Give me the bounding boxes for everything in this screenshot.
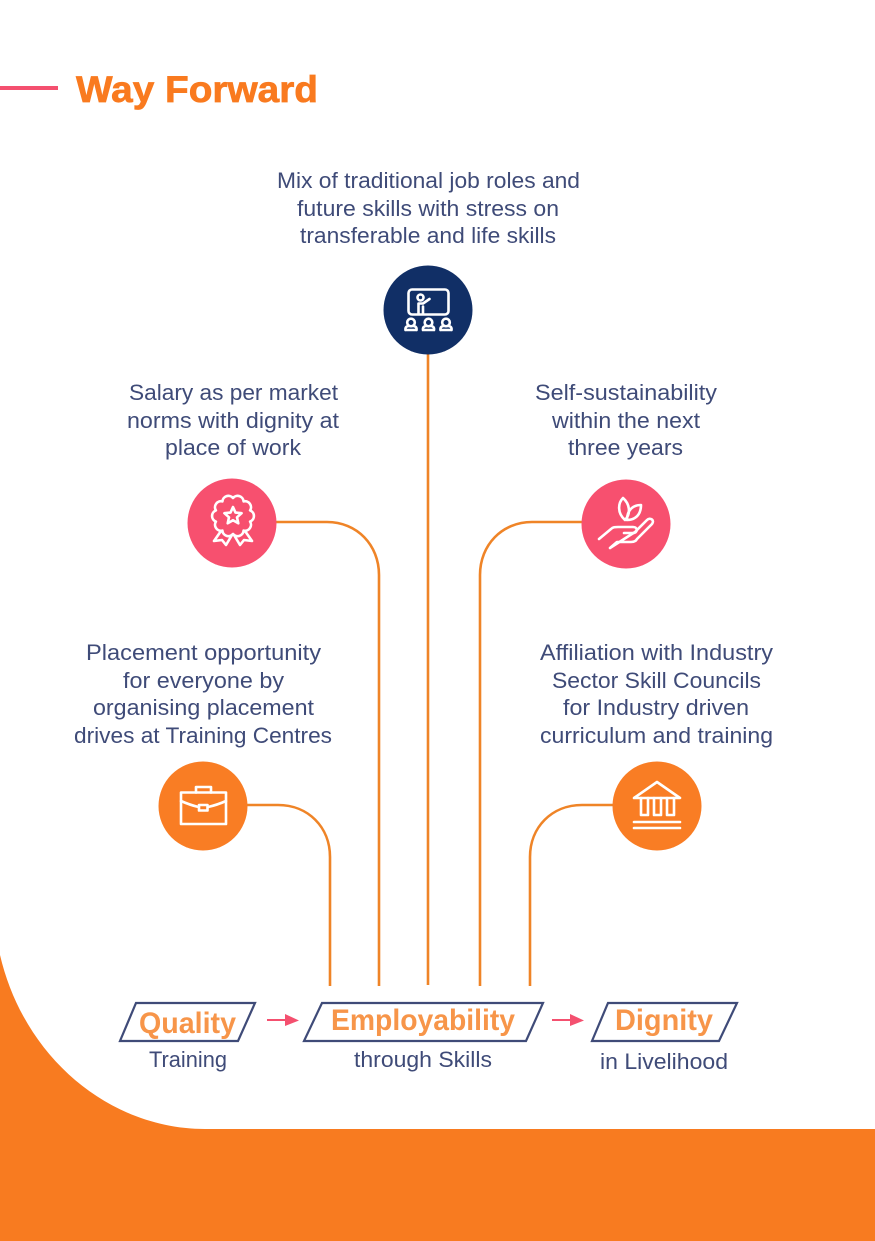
box: employability through skills: through Skills: [354, 1047, 492, 1072]
text: placement: Placement opportunity: [86, 640, 321, 665]
text: placement: [74, 640, 332, 748]
box: employability through skills: Employability: [331, 1004, 515, 1037]
icon: hand with plant: [582, 480, 670, 568]
text: self-sustainability: within the next: [551, 408, 700, 433]
arrow: [552, 1014, 584, 1026]
text: salary: norms with dignity at: [127, 408, 339, 433]
box: quality training: Training: [149, 1047, 227, 1072]
text: self-sustainability: three years: [568, 435, 683, 460]
icon: classroom: [384, 266, 472, 354]
icon: institution building: [612, 762, 702, 850]
text: placement: for everyone by: [123, 668, 284, 693]
text: salary: [127, 380, 339, 460]
connector lines: [243, 350, 616, 986]
icon: award rosette: [188, 478, 276, 568]
box: dignity in livelihood: [592, 1003, 737, 1074]
text: traditional job roles: [277, 168, 580, 248]
box: dignity in livelihood: in Livelihood: [600, 1049, 728, 1074]
box: dignity in livelihood: Dignity: [615, 1004, 713, 1037]
arrow: [267, 1014, 299, 1026]
text: self-sustainability: [535, 380, 717, 460]
box: quality training: [120, 1003, 255, 1072]
text: salary: Salary as per market: [129, 380, 338, 405]
orange background shape: [0, 955, 875, 1241]
text: traditional job roles: future skills with stress on: [297, 196, 559, 221]
box: employability through skills: [304, 1003, 543, 1072]
icon: briefcase: [158, 762, 248, 850]
text: affiliation: Sector Skill Councils: [552, 668, 761, 693]
text: affiliation: for Industry driven: [563, 695, 749, 720]
text: salary: place of work: [165, 435, 302, 460]
text: affiliation: curriculum and training: [540, 723, 773, 748]
text: placement: organising placement: [93, 695, 314, 720]
text: affiliation: Affiliation with Industry: [540, 640, 773, 665]
text: traditional job roles: transferable and life skills: [300, 223, 556, 248]
box: quality training: Quality: [139, 1007, 236, 1040]
text: placement: drives at Training Centres: [74, 723, 332, 748]
text: self-sustainability: Self-sustainability: [535, 380, 717, 405]
text: traditional job roles: Mix of traditional job roles and: [277, 168, 580, 193]
text: affiliation: [540, 640, 773, 748]
title: Way Forward: [76, 69, 318, 110]
